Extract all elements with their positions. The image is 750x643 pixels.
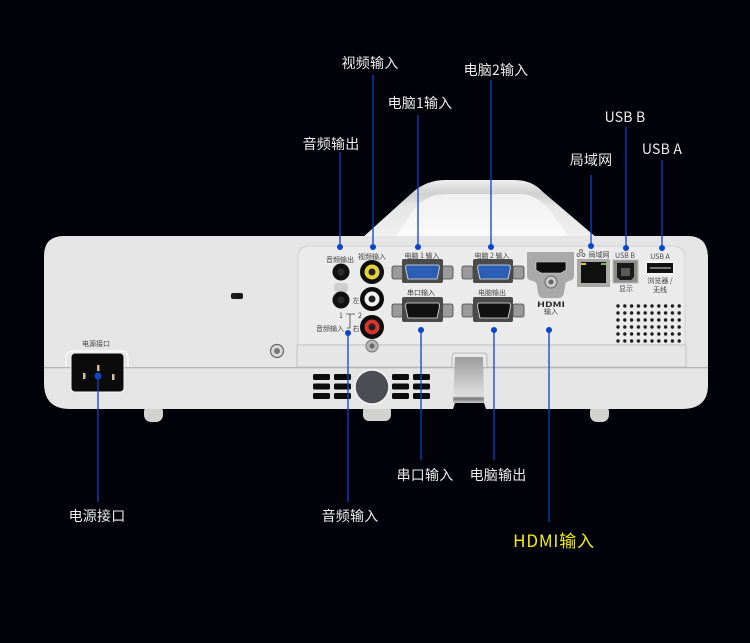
kensington slot [231,293,243,299]
audio out and audio in jacks: 1 [339,311,343,321]
VGA ports: 电脑 1 输入 [404,251,440,261]
RCA connectors: 右 [352,324,360,334]
USB A port [646,252,674,295]
USB B port: 显示 [619,284,633,294]
RCA connectors: 视频输入 [358,252,386,262]
screw [270,344,284,358]
HDMI port: 输入 [544,307,558,317]
labels: 电脑输出 [470,465,526,485]
USB A port: USB A [650,252,671,262]
projector top handle [362,180,597,238]
vent and lens [313,370,430,404]
RCA connectors [352,252,386,352]
lower panel strip [297,345,686,367]
VGA ports [392,251,524,322]
audio out and audio in jacks: 音频输入 [316,324,344,334]
USB B port: USB B [615,251,635,261]
USB B port [613,251,638,294]
labels: 视频输入 [342,53,398,73]
labels: 电脑2输入 [464,60,528,80]
power socket: 电源接口 [82,339,110,349]
projector feet [144,405,609,422]
HDMI port: HDMI [537,300,565,310]
labels [69,53,682,552]
VGA ports: 串口输入 [407,288,435,298]
projector body [44,236,708,409]
labels: 电脑1输入 [388,93,452,113]
cable notch [452,353,487,409]
projector [44,180,708,422]
USB A port: 浏览器 / [647,276,673,286]
labels: 串口输入 [397,465,453,485]
LAN port [577,250,610,287]
speaker grille [615,303,682,344]
labels: 局域网 [570,150,612,170]
LAN port: 局域网 [588,250,610,260]
labels: 音频输入 [322,506,378,526]
labels: 音频输出 [303,134,359,154]
audio out and audio in jacks [316,255,362,334]
labels: USB B [605,107,645,127]
audio out and audio in jacks: 音频输出 [326,255,354,265]
VGA ports: 电脑输出 [478,288,506,298]
connector panel [298,246,685,345]
RCA connectors: 左 [352,296,360,306]
USB A port: 无线 [653,285,667,295]
labels: USB A [642,139,682,159]
HDMI port [527,252,574,317]
power socket [66,339,128,392]
labels: HDMI输入 [513,527,595,552]
labels: 电源接口 [69,506,125,526]
VGA ports: 电脑 2 输入 [474,251,510,261]
leader lines [94,75,665,522]
audio out and audio in jacks: 2 [358,311,362,321]
